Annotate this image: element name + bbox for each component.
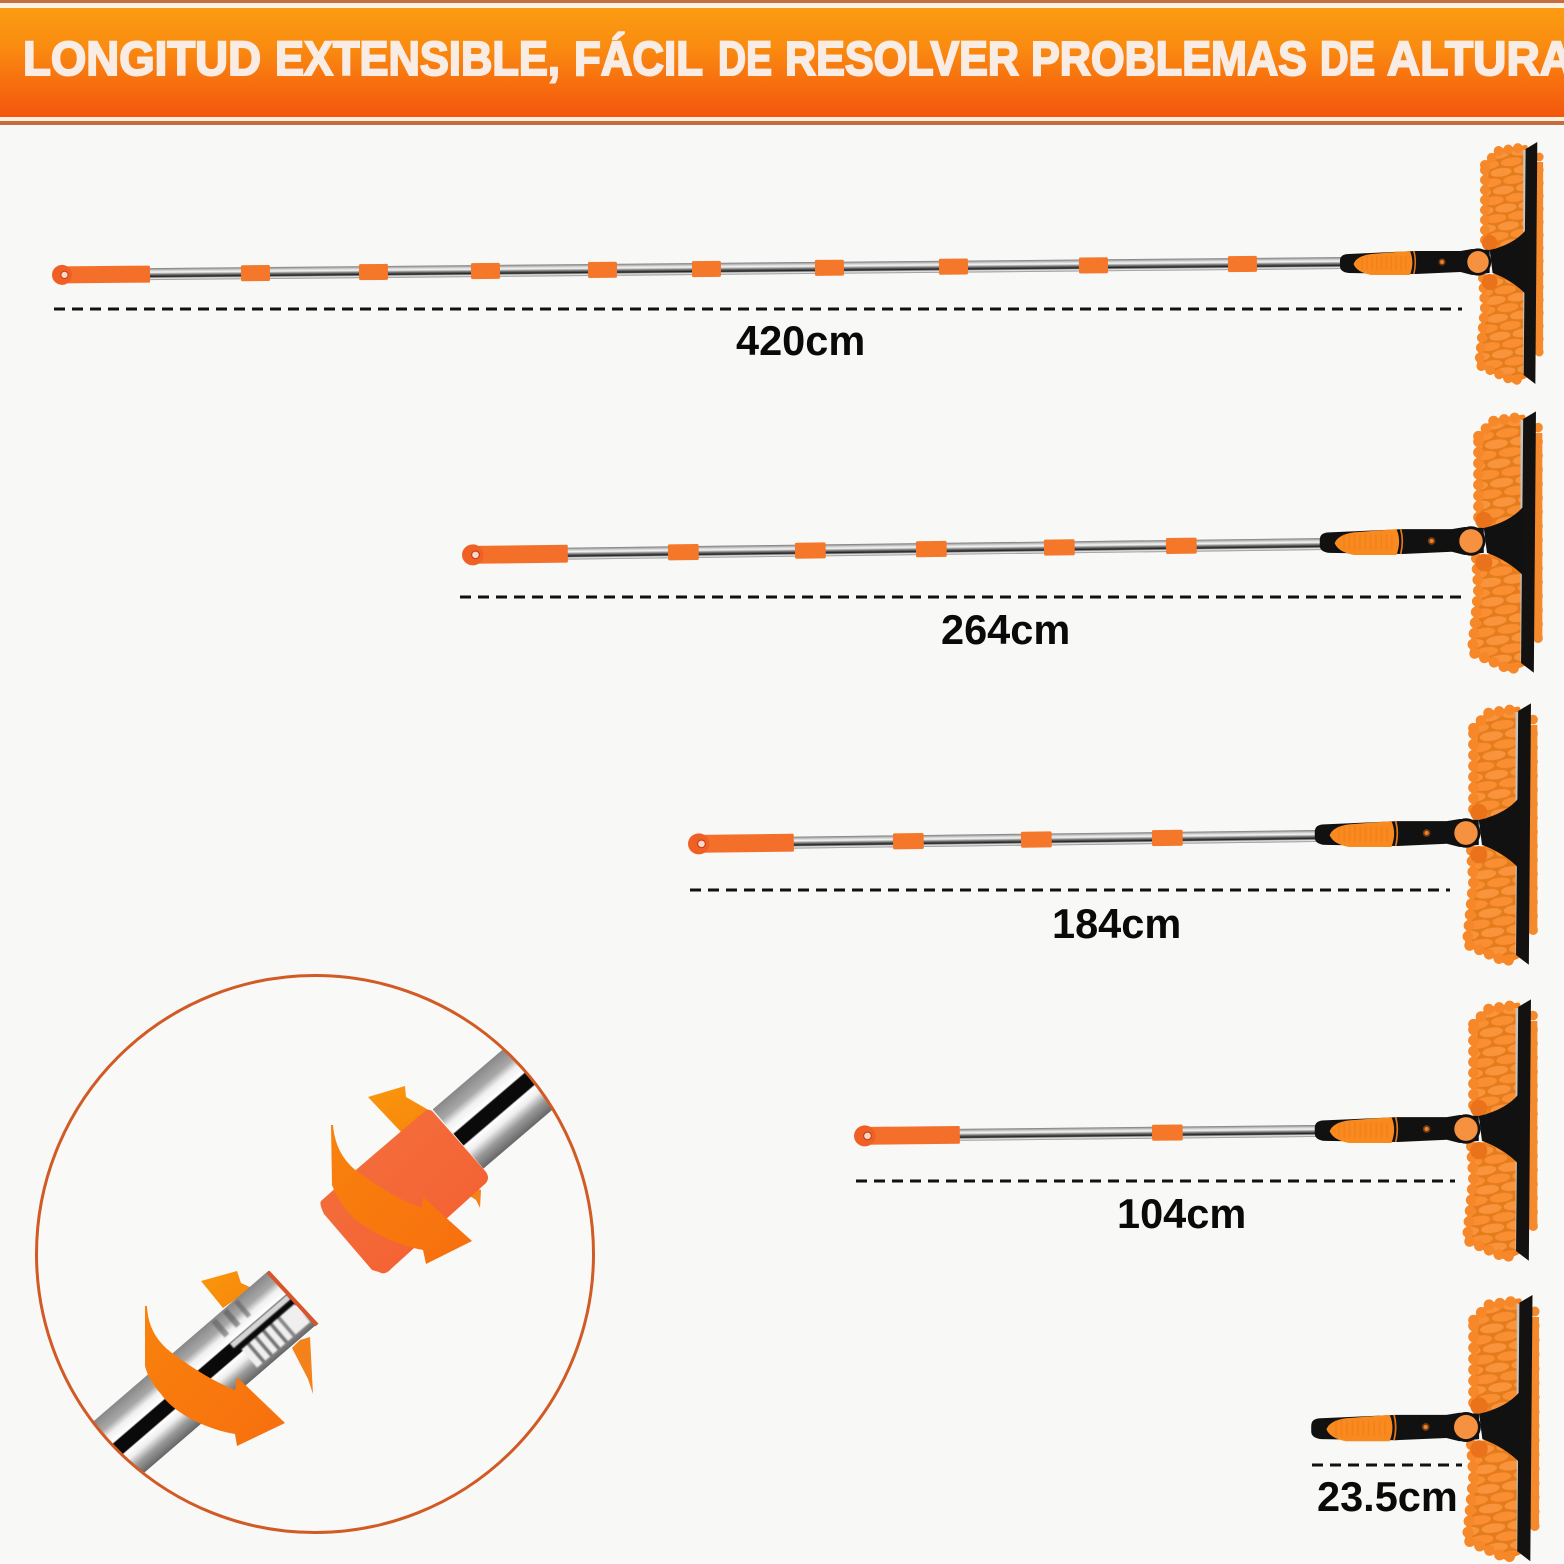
label 264cm: 264cm xyxy=(941,606,1070,653)
mop at 264cm xyxy=(462,411,1538,673)
circle outline xyxy=(36,976,594,1532)
front arrow: lower xyxy=(145,1306,285,1446)
label 420cm: 420cm xyxy=(736,317,865,364)
title: PROBLEMAS xyxy=(1031,33,1307,86)
title: RESOLVER xyxy=(785,33,1019,86)
dimension line 264cm xyxy=(460,596,1462,598)
back arrow tail: lower xyxy=(292,1337,313,1394)
title xyxy=(23,32,1564,86)
header banner xyxy=(0,0,1564,125)
front arrow: upper xyxy=(331,1125,472,1264)
shaft end rim xyxy=(268,1272,317,1325)
mop at 184cm xyxy=(688,703,1533,965)
label 184cm: 184cm xyxy=(1052,900,1181,947)
mop at 420cm xyxy=(52,142,1539,384)
dimension line 420cm xyxy=(54,308,1462,310)
upper steel shaft xyxy=(432,1050,552,1168)
orange collar xyxy=(320,1110,488,1273)
label 23.5cm: 23.5cm xyxy=(1317,1473,1458,1520)
back arrow: upper xyxy=(368,1086,432,1132)
title: EXTENSIBLE, xyxy=(275,33,560,86)
title: DE xyxy=(718,33,772,86)
back arrow tail: upper xyxy=(470,1188,481,1208)
title: LONGITUD xyxy=(23,33,261,86)
detail circle: twist lock xyxy=(36,976,597,1532)
dimension line 184cm xyxy=(690,888,1450,892)
back arrow: lower xyxy=(201,1271,252,1308)
dimension line 104cm xyxy=(856,1180,1455,1182)
title: FÁCIL xyxy=(574,32,703,86)
label 104cm: 104cm xyxy=(1117,1190,1246,1237)
mop at 104cm xyxy=(854,999,1533,1261)
lower steel shaft xyxy=(94,1270,315,1472)
title: DE xyxy=(1320,33,1375,86)
dimension line 23.5cm xyxy=(1312,1464,1462,1466)
mop at 23.5cm xyxy=(1311,1295,1535,1561)
